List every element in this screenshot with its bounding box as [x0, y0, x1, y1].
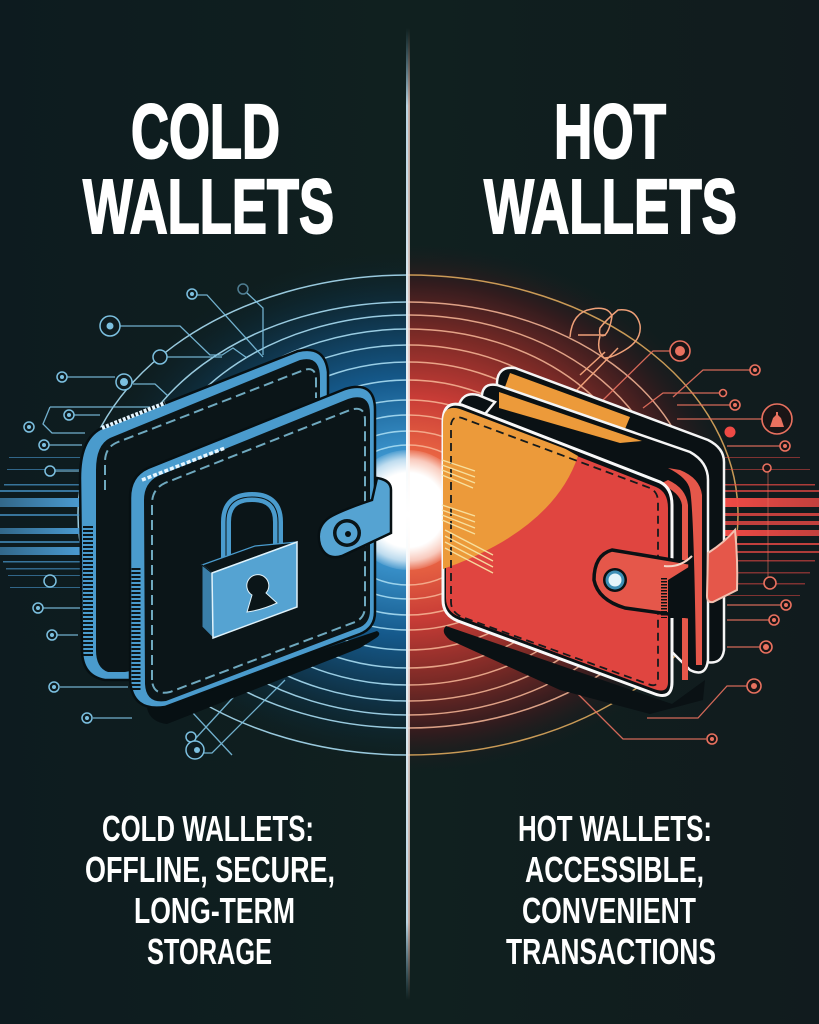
- heading: cold wallets: [83, 89, 334, 250]
- cold data stripes: [0, 457, 80, 588]
- center divider line: [406, 28, 410, 1000]
- hot knot icon: [570, 308, 640, 392]
- caption: hot wallets: HOT WALLETS:: [518, 808, 712, 849]
- central glow: [348, 450, 468, 570]
- cold wallet back panel: [80, 350, 328, 680]
- heading: hot wallets: [484, 89, 737, 250]
- hot data stripes: [725, 457, 819, 596]
- hot wallet clasp: [594, 530, 737, 618]
- hot wallet illustration: [440, 368, 737, 714]
- cold wallet illustration: [80, 350, 391, 724]
- caption: cold wallets: [85, 808, 335, 972]
- cold wallet front panel: [130, 387, 375, 708]
- caption: hot wallets: TRANSACTIONS: [506, 931, 716, 972]
- hot wallet shadow: [444, 626, 705, 714]
- caption: hot wallets: ACCESSIBLE,: [525, 849, 704, 890]
- cold circuit nodes: [24, 284, 248, 759]
- heading: hot wallets: HOT: [554, 89, 666, 175]
- hot radial halo: [408, 260, 704, 754]
- cold radial halo: [146, 276, 406, 740]
- caption: hot wallets: [506, 808, 716, 972]
- heading: cold wallets: WALLETS: [83, 164, 334, 250]
- hot wallet highlight hatch: [442, 460, 493, 573]
- heading: cold wallets: COLD: [131, 89, 280, 175]
- cold concentric rings: [77, 274, 406, 756]
- caption: cold wallets: LONG-TERM: [134, 890, 295, 931]
- caption: hot wallets: CONVENIENT: [522, 890, 696, 931]
- cold wallet clasp: [319, 478, 391, 557]
- hot wallet front face: [440, 400, 672, 696]
- hot circuit nodes: [670, 341, 792, 744]
- cold circuit lines: [43, 293, 285, 755]
- caption: cold wallets: COLD WALLETS:: [102, 808, 314, 849]
- hot circuit lines: [577, 351, 781, 739]
- hot wallet rear pages: [458, 368, 724, 680]
- caption: cold wallets: STORAGE: [147, 931, 272, 972]
- cold wallet shadow: [147, 631, 379, 724]
- hot concentric rings: [408, 274, 739, 756]
- icon: padlock: [202, 497, 297, 638]
- caption: cold wallets: OFFLINE, SECURE,: [85, 849, 335, 890]
